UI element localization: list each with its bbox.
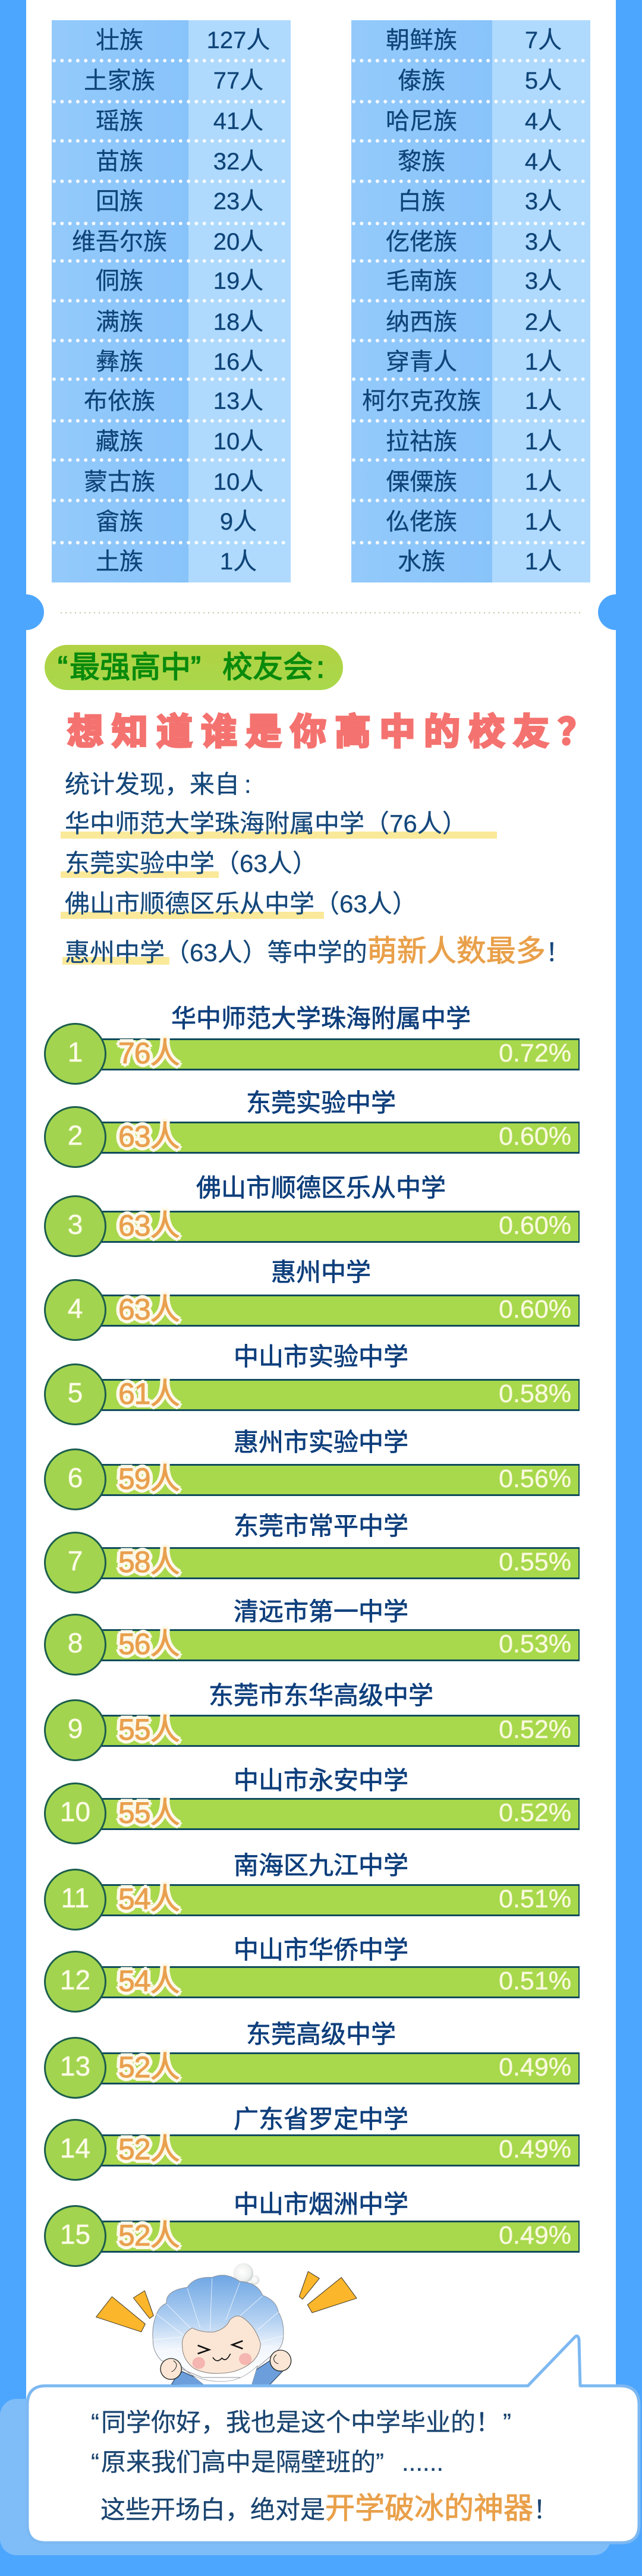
student count: 63人 xyxy=(118,1293,180,1326)
ticket notch left xyxy=(8,594,44,630)
table: ethnic groups right: 3人 xyxy=(525,229,562,255)
bar xyxy=(89,1379,580,1411)
student count: 56人 xyxy=(118,1627,180,1661)
ranking row 8 xyxy=(44,1598,580,1676)
rank badge: 11 xyxy=(61,1882,89,1913)
table: ethnic groups left: 回族 xyxy=(96,188,143,215)
bar xyxy=(89,1798,580,1830)
rank badge xyxy=(44,1023,106,1085)
student count: 76人 xyxy=(118,1037,180,1070)
table: ethnic groups left: 77人 xyxy=(213,68,263,94)
student count: 52人 xyxy=(118,2219,180,2252)
table: ethnic groups left: 18人 xyxy=(213,309,263,335)
table: ethnic groups right: 4人 xyxy=(525,149,562,175)
table: ethnic groups right: 1人 xyxy=(525,388,562,414)
line: intro: 统计发现，来自: xyxy=(65,770,251,798)
table: ethnic groups right: 毛南族 xyxy=(386,268,457,294)
school name: 南海区九江中学 xyxy=(234,1851,408,1879)
bar xyxy=(89,1966,580,1998)
rank badge xyxy=(44,1279,106,1341)
ranking row 1 xyxy=(44,1004,580,1085)
school name: 佛山市顺德区乐从中学 xyxy=(196,1174,446,1202)
school name: 广东省罗定中学 xyxy=(234,2105,408,2133)
ticket notch right xyxy=(598,594,634,630)
percentage: 0.60% xyxy=(499,1295,571,1324)
table: ethnic groups left: 土族 xyxy=(96,549,143,575)
table: ethnic groups left: 苗族 xyxy=(96,149,143,175)
table: ethnic groups right: 1人 xyxy=(525,469,562,495)
rank badge xyxy=(44,1106,106,1168)
rank badge xyxy=(44,1614,106,1676)
rank badge: 10 xyxy=(60,1796,90,1827)
table: ethnic groups left xyxy=(52,20,291,582)
table: ethnic groups left: 10人 xyxy=(213,469,263,495)
student count: 52人 xyxy=(118,2133,180,2166)
school name: 东莞高级中学 xyxy=(246,2020,396,2048)
school name: 惠州中学 xyxy=(271,1258,371,1286)
table: ethnic groups right: 1人 xyxy=(525,549,562,575)
student count: 63人 xyxy=(118,1209,180,1242)
highlight 1 xyxy=(61,832,497,839)
table: ethnic groups left: 32人 xyxy=(213,149,263,175)
table: ethnic groups right: 7人 xyxy=(525,27,562,53)
percentage: 0.51% xyxy=(499,1967,571,1995)
table: ethnic groups left: 19人 xyxy=(213,268,263,294)
rank badge xyxy=(44,1699,106,1761)
student count: 61人 xyxy=(118,1377,180,1410)
table: ethnic groups left: 土家族 xyxy=(84,68,155,94)
table: ethnic groups right: 5人 xyxy=(525,68,562,94)
percentage: 0.49% xyxy=(499,2221,571,2250)
table: ethnic groups right: 4人 xyxy=(525,108,562,134)
rank badge: 15 xyxy=(60,2219,90,2250)
rank badge xyxy=(44,1951,106,2013)
table: ethnic groups left: 16人 xyxy=(213,349,263,375)
table: ethnic groups left: 侗族 xyxy=(96,268,143,294)
school name: 华中师范大学珠海附属中学 xyxy=(171,1004,471,1032)
school name: 中山市永安中学 xyxy=(234,1766,408,1794)
table: ethnic groups left: 满族 xyxy=(96,309,143,335)
ranking row 14 xyxy=(44,2105,580,2181)
rank badge xyxy=(44,1363,106,1425)
rank badge: 12 xyxy=(60,1964,90,1995)
bar xyxy=(89,1211,580,1243)
student count: 55人 xyxy=(118,1713,180,1746)
column: names xyxy=(52,20,188,582)
percentage: 0.49% xyxy=(499,2053,571,2081)
column: counts xyxy=(188,20,291,582)
ranking row 13 xyxy=(44,2020,580,2099)
table: ethnic groups right: 1人 xyxy=(525,429,562,455)
text block: statistics intro xyxy=(61,770,571,968)
bar xyxy=(89,1629,580,1661)
highlight 2 xyxy=(61,871,219,878)
rank badge: 8 xyxy=(68,1627,83,1658)
table: ethnic groups right: 3人 xyxy=(525,188,562,215)
bar xyxy=(89,1038,580,1070)
rank badge xyxy=(44,1532,106,1594)
table: ethnic groups right: 1人 xyxy=(525,349,562,375)
bar xyxy=(89,1547,580,1579)
section heading pill xyxy=(45,645,343,690)
rank badge xyxy=(44,2205,106,2267)
table: ethnic groups right: 傈僳族 xyxy=(386,469,457,495)
bar xyxy=(89,1122,580,1154)
student count: 54人 xyxy=(118,1882,180,1916)
percentage: 0.72% xyxy=(499,1039,571,1067)
table: ethnic groups right: 1人 xyxy=(525,509,562,535)
ranking row 10 xyxy=(44,1766,580,1844)
ranking row 15 xyxy=(44,2190,580,2267)
rank badge xyxy=(44,2037,106,2099)
table: ethnic groups left: 壮族 xyxy=(96,27,143,53)
ranking row 3 xyxy=(44,1174,580,1257)
table: ethnic groups right: 拉祜族 xyxy=(386,429,457,455)
rank badge: 3 xyxy=(68,1209,83,1240)
school name: 清远市第一中学 xyxy=(234,1598,408,1626)
bar xyxy=(89,2134,580,2166)
line: school 3: 佛山市顺德区乐从中学（63人） xyxy=(65,890,417,918)
table: ethnic groups left: 10人 xyxy=(213,429,263,455)
student count: 55人 xyxy=(118,1796,180,1829)
rank badge xyxy=(44,1869,106,1931)
table: ethnic groups left: 维吾尔族 xyxy=(72,229,167,255)
table: ethnic groups right: 黎族 xyxy=(398,149,445,175)
table: ethnic groups left: 23人 xyxy=(213,188,263,215)
table: ethnic groups right: 仫佬族 xyxy=(386,509,457,535)
percentage: 0.56% xyxy=(499,1465,571,1493)
highlight 3 xyxy=(61,912,324,919)
rank badge: 1 xyxy=(68,1037,83,1067)
bar xyxy=(89,1295,580,1327)
percentage: 0.53% xyxy=(499,1630,571,1658)
percentage: 0.55% xyxy=(499,1548,571,1576)
table: ethnic groups right: 傣族 xyxy=(398,68,445,94)
student count: 63人 xyxy=(118,1120,180,1153)
percentage: 0.58% xyxy=(499,1380,571,1408)
table: ethnic groups right: 3人 xyxy=(525,268,562,294)
column: names xyxy=(351,20,492,582)
rank badge xyxy=(44,1783,106,1844)
rank badge: 5 xyxy=(68,1377,83,1408)
quote line 1: “同学你好，我也是这个中学毕业的！” xyxy=(91,2408,511,2436)
table: ethnic groups left: 9人 xyxy=(220,509,257,535)
table: ethnic groups left: 藏族 xyxy=(96,429,143,455)
rank badge: 7 xyxy=(68,1545,83,1576)
speech bubble xyxy=(26,2335,641,2544)
table: ethnic groups left: 20人 xyxy=(213,229,263,255)
highlight 4 xyxy=(62,957,169,965)
ranking row 7 xyxy=(44,1512,580,1594)
bubble back layer xyxy=(0,2399,610,2555)
school name: 东莞市常平中学 xyxy=(234,1512,408,1540)
line: school 1: 华中师范大学珠海附属中学（76人） xyxy=(65,810,467,837)
student count: 52人 xyxy=(118,2051,180,2084)
bubble text xyxy=(91,2408,558,2525)
bar xyxy=(89,1464,580,1496)
school name: 惠州市实验中学 xyxy=(234,1428,408,1456)
school name: 东莞市东华高级中学 xyxy=(209,1681,433,1709)
table: ethnic groups left: 13人 xyxy=(213,388,263,414)
rank badge: 4 xyxy=(68,1293,83,1324)
percentage: 0.60% xyxy=(499,1122,571,1151)
percentage: 0.49% xyxy=(499,2135,571,2164)
bar xyxy=(89,2052,580,2084)
percentage: 0.60% xyxy=(499,1211,571,1240)
bar xyxy=(89,2221,580,2253)
table: ethnic groups left: 瑶族 xyxy=(96,108,143,134)
ranking row 4 xyxy=(44,1258,580,1341)
school name: 中山市华侨中学 xyxy=(234,1936,408,1964)
ranking row 6 xyxy=(44,1428,580,1510)
line: school 4 with emphasis: 惠州中学（63人）等中学的萌新人数最多！ xyxy=(65,934,571,968)
ranking row 2 xyxy=(44,1089,580,1168)
table: ethnic groups left: 127人 xyxy=(207,27,270,53)
table: ethnic groups right: 2人 xyxy=(525,309,562,335)
rank badge xyxy=(44,2119,106,2181)
table: ethnic groups left: 1人 xyxy=(220,549,257,575)
table: ethnic groups left: 蒙古族 xyxy=(84,469,155,495)
table: ethnic groups right: 朝鲜族 xyxy=(386,27,457,53)
student count: 58人 xyxy=(118,1545,180,1579)
rank badge: 14 xyxy=(60,2133,90,2164)
ranking row 9 xyxy=(44,1681,580,1761)
table: ethnic groups right: 白族 xyxy=(398,188,445,215)
table: ethnic groups left: 布依族 xyxy=(84,388,155,414)
rank badge: 6 xyxy=(68,1462,83,1493)
school name: 中山市实验中学 xyxy=(234,1343,408,1371)
student count: 59人 xyxy=(118,1462,180,1495)
table: ethnic groups right: 仡佬族 xyxy=(386,229,457,255)
rank badge xyxy=(44,1448,106,1510)
table: ethnic groups right: 哈尼族 xyxy=(386,108,457,134)
table: ethnic groups left: 41人 xyxy=(213,108,263,134)
rank badge xyxy=(44,1195,106,1257)
table: ethnic groups right: 柯尔克孜族 xyxy=(362,388,481,414)
ranking row 11 xyxy=(44,1851,580,1931)
school name: 东莞实验中学 xyxy=(246,1089,396,1117)
bar xyxy=(89,1884,580,1916)
ranking row 12 xyxy=(44,1936,580,2013)
line: school 2: 东莞实验中学（63人） xyxy=(65,849,317,877)
student count: 54人 xyxy=(118,1964,180,1998)
percentage: 0.51% xyxy=(499,1885,571,1913)
table: ethnic groups right: 穿青人 xyxy=(386,349,457,375)
mascot: shell character with burst marks xyxy=(96,2263,357,2385)
table: ethnic groups right: 纳西族 xyxy=(386,309,457,335)
section heading pill: “最强高中” 校友会: xyxy=(58,650,325,684)
table: ethnic groups left: 彝族 xyxy=(96,349,143,375)
headline: 想知道谁是你高中的校友？ xyxy=(67,711,602,752)
percentage: 0.52% xyxy=(499,1799,571,1827)
column: counts xyxy=(492,20,590,582)
table: ethnic groups right: 水族 xyxy=(398,549,445,575)
table: ethnic groups right xyxy=(351,20,590,582)
ranking row 5 xyxy=(44,1343,580,1425)
closing line with emphasis: 这些开场白，绝对是开学破冰的神器！ xyxy=(100,2492,558,2525)
rank badge: 2 xyxy=(68,1120,83,1151)
rank badge: 9 xyxy=(68,1713,83,1744)
percentage: 0.52% xyxy=(499,1715,571,1744)
bar xyxy=(89,1715,580,1747)
table: ethnic groups left: 畲族 xyxy=(96,509,143,535)
quote line 2: “原来我们高中是隔壁班的” ...... xyxy=(91,2448,443,2476)
school name: 中山市烟洲中学 xyxy=(234,2190,408,2218)
rank badge: 13 xyxy=(60,2051,90,2081)
